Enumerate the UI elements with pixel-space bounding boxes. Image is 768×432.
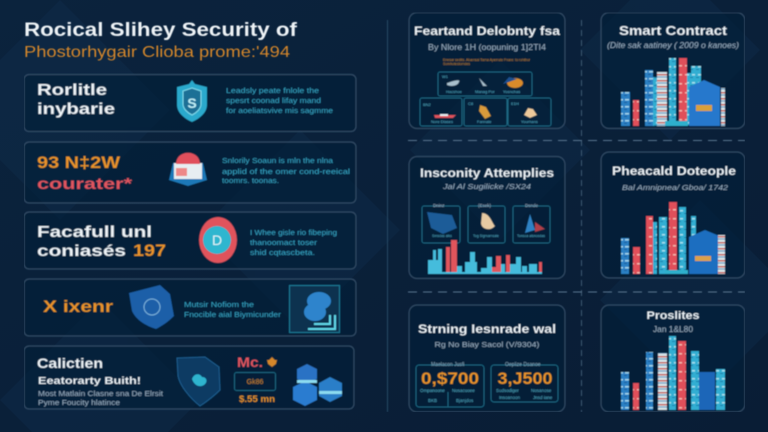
image tiles: Dsnde xyxy=(525,203,539,208)
panel: smart contract: Smart Contract xyxy=(619,24,728,38)
icon: leaf shield xyxy=(177,357,220,406)
panel: calciten: Calictien xyxy=(37,355,103,371)
panel: feature deployment: Somhoteslomdes xyxy=(443,62,470,66)
stat tiles: C8 xyxy=(468,101,474,106)
panel: shield summary: inybarie xyxy=(37,101,115,118)
panel: strong insurance: Strning Iesnrade wal xyxy=(418,324,556,336)
stat: 0,9700: Maelacon Jusfi xyxy=(431,362,464,368)
stat tiles xyxy=(420,72,551,126)
panel: strong insurance: Rg No Biay Sacol (V/9304) xyxy=(434,340,540,349)
panel: exchange xyxy=(24,279,356,336)
panel: counter: Snlorily Soaun is mln the nlna xyxy=(222,156,334,165)
panel: counter: toomrs. toonas. xyxy=(222,176,279,185)
panel: stats 197: coniasés xyxy=(37,243,126,260)
panel: proslites: Jan 1&L80 xyxy=(653,325,694,334)
panel: proslites xyxy=(601,305,745,412)
image tiles: (Esek) xyxy=(478,203,492,208)
panel: pheacald doteople: Pheacald Doteople xyxy=(612,164,736,178)
stat: MC xyxy=(234,354,277,404)
bar chart xyxy=(621,58,725,126)
panel: smart contract xyxy=(601,12,745,128)
panel: stats 197: thanoomact toser xyxy=(250,238,318,247)
stat tiles: Yourhans xyxy=(521,119,538,124)
panel: feature deployment: Enesar sedits. Aluensal Tama Aperrute Fnare: to rohtbur xyxy=(443,58,531,62)
stat: 3,1500: Jnsd iane xyxy=(533,395,553,400)
panel: counter: courater* xyxy=(37,176,133,193)
panel: smart contract: (Dite sak aatiney ( 2009 o kanoes) xyxy=(607,41,739,50)
title: Rocical Slihey Security of xyxy=(24,20,298,41)
stat tiles: W1 xyxy=(442,74,449,79)
panel: counter: 93 N‡2W xyxy=(37,153,121,172)
panel: stats 197: I Whee gisle rio fibeping xyxy=(250,228,337,237)
panel: stats 197: 197 xyxy=(133,241,166,260)
image tiles: Smsdas alks xyxy=(432,234,452,238)
panel: calciten: Pyme Foucity hlatince xyxy=(38,398,120,407)
stat: 3,1500: Insoanoon xyxy=(499,395,521,400)
stat: 0,9700: Ompanoone xyxy=(420,388,445,393)
stat: MC: Gk86 xyxy=(247,379,263,386)
bar chart xyxy=(621,336,725,410)
panel: insecurity attempts: Jal Al Sugilicke /SX24 xyxy=(442,182,531,191)
bar chart xyxy=(428,240,542,274)
stat: 3,1500: Sudsodiger xyxy=(496,388,519,393)
stat: 3,1500: Oeplize Dsanoe xyxy=(505,362,541,368)
panel: shield summary: Rorlitle xyxy=(37,82,107,99)
panel: stats 197 xyxy=(24,212,356,269)
stat: 3,1500: 3,J500 xyxy=(498,369,552,388)
panel: exchange: Fnocible aial Biymicunder xyxy=(184,310,282,319)
panel: calciten: Most Matlain Clasne sna De Elrsit xyxy=(38,389,164,398)
panel: shield summary: spesrt coonad lifay mand xyxy=(226,96,321,105)
icon: shield: S xyxy=(187,95,197,111)
stat tiles: Yosnchas xyxy=(503,89,520,94)
image tiles: Tonsoa alsnosdas xyxy=(517,234,545,238)
panel: strong insurance xyxy=(409,305,565,412)
icon: shield xyxy=(177,80,207,122)
panel: feature deployment xyxy=(409,12,565,128)
stat tiles: Fannale xyxy=(477,119,492,124)
stat tiles: Hacshoe xyxy=(446,89,463,94)
panel: proslites: Proslites xyxy=(646,310,700,322)
stat: 0,9700: Nosacuoee xyxy=(452,388,475,393)
image tiles xyxy=(422,203,550,243)
stat tiles: Nore Dlases xyxy=(431,119,453,124)
stat: 0,9700: BKB xyxy=(428,398,437,403)
panel: counter xyxy=(24,142,356,203)
icon: book xyxy=(169,153,207,186)
image tiles: Tog Sigmamsale xyxy=(473,234,499,238)
panel: shield summary: for aoeliatsvive mis sagmme xyxy=(226,106,333,115)
panel: stats 197: Facafull unl xyxy=(37,224,152,241)
bar chart xyxy=(621,202,725,274)
panel: feature deployment: By Nlore 1H (oopuning 1]2TI4 xyxy=(428,42,546,52)
stat: 0,9700 xyxy=(416,362,484,407)
panel: insecurity attempts xyxy=(409,156,565,278)
stat tiles: Manag Por xyxy=(475,89,495,94)
panel: exchange: Mutsir Nofiom the xyxy=(184,300,254,309)
dividers xyxy=(388,20,745,412)
panel: exchange: X ixenr xyxy=(43,297,113,316)
panel: calciten xyxy=(24,346,354,409)
icon: disc: D xyxy=(212,232,222,248)
title: Phostorhygair Clioba prome:'494 xyxy=(24,44,290,61)
image tiles: Dninz xyxy=(433,203,445,208)
stat tiles: E1H xyxy=(511,101,519,106)
panel: shield summary xyxy=(24,74,356,132)
title xyxy=(24,20,298,61)
icon: cloud tile xyxy=(290,286,340,332)
icon: disc xyxy=(199,217,237,263)
stat: 0,9700: 0,$700 xyxy=(421,369,479,388)
panel: pheacald doteople xyxy=(601,152,745,278)
stat: MC: $.55 mn xyxy=(239,394,275,404)
stat tiles: BN2 xyxy=(423,102,432,107)
icon: cubes xyxy=(293,364,342,406)
panel: pheacald doteople: Bal Amnipnea/ Gboa/ 1742 xyxy=(622,183,729,192)
stat: 3,1500: Nosanose xyxy=(531,388,552,393)
icon: blue shield xyxy=(129,285,174,329)
stat: MC: Mc. xyxy=(237,354,263,370)
panel: calciten: Eeatorarty Buith! xyxy=(38,375,141,387)
stat: 0,9700: Bjanjdos xyxy=(456,398,474,403)
panel: counter: applid of the omer cond-reeical xyxy=(222,167,350,176)
panel: feature deployment: Feartand Delobnty fsa xyxy=(414,24,560,38)
panel: insecurity attempts: Insconity Attemplies xyxy=(420,168,554,180)
panel: stats 197: shid cqtascbeta. xyxy=(250,248,315,257)
stat: 3,1500 xyxy=(491,362,558,402)
panel: shield summary: Leadsly peate fnlole the xyxy=(226,86,319,95)
